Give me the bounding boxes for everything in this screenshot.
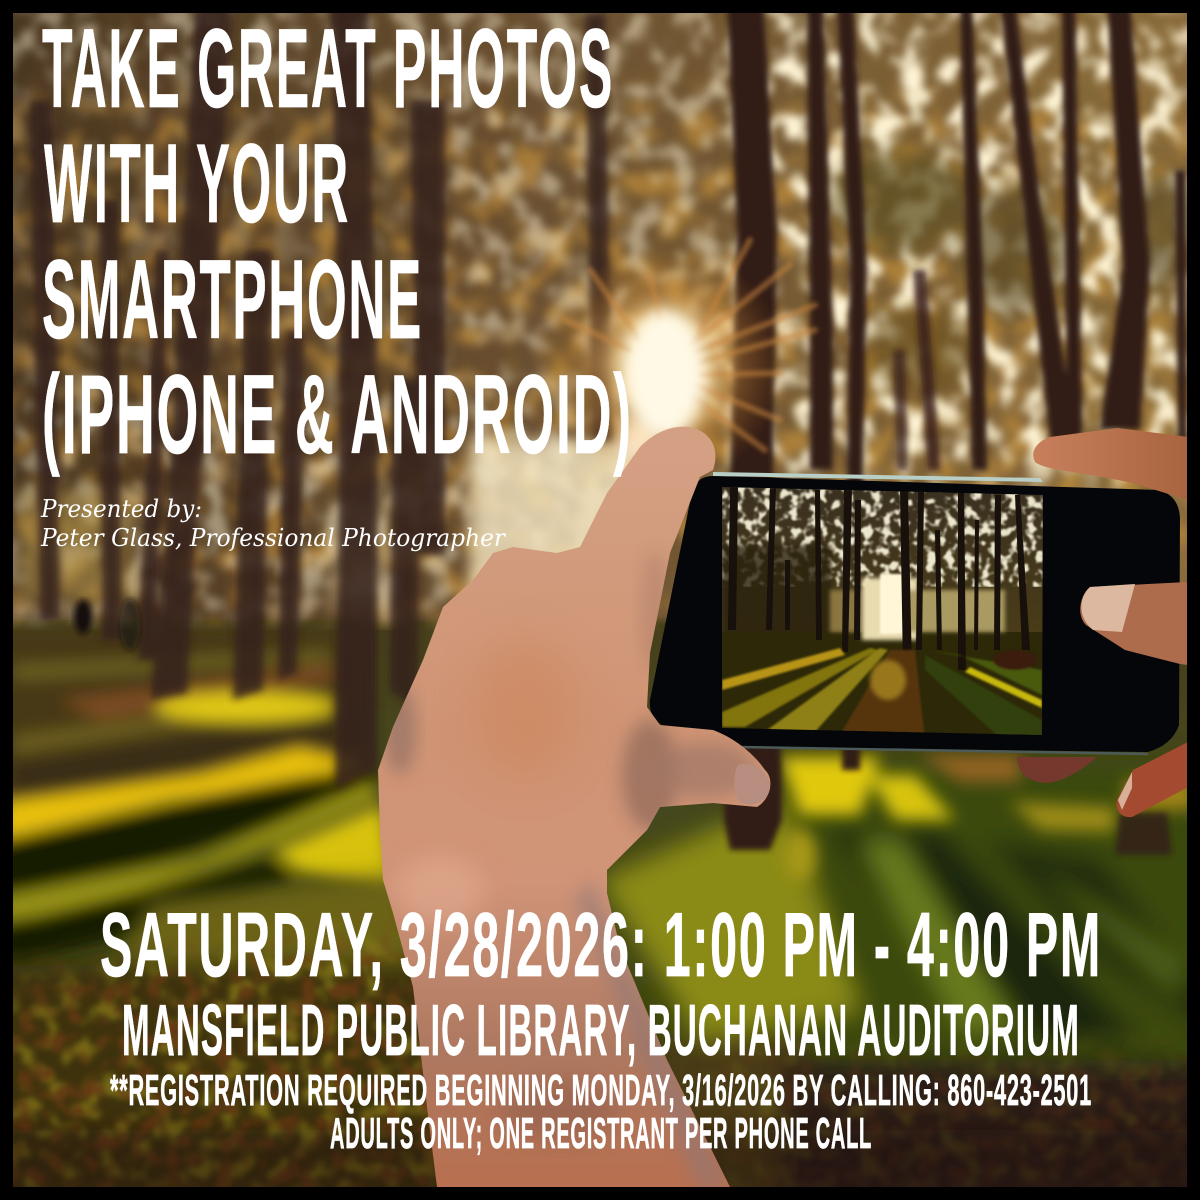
right hand fingers — [1033, 428, 1188, 817]
title: SMARTPHONE — [42, 237, 423, 362]
sun glow and rays — [545, 240, 815, 485]
title — [42, 6, 633, 477]
foliage highlights — [0, 0, 1200, 630]
presenter credit — [40, 495, 506, 552]
registration details — [110, 1066, 1092, 1158]
smartphone — [650, 472, 1180, 754]
left hand holding phone — [378, 427, 770, 1190]
ground light and shadow bands — [0, 630, 1200, 1200]
title: WITH YOUR — [44, 121, 350, 246]
presenter credit: Peter Glass, Professional Photographer — [40, 524, 506, 552]
tree trunks — [724, 0, 1187, 855]
phone screen forest image — [722, 487, 1043, 742]
right-hand back finger — [1017, 757, 1097, 783]
presenter credit: Presented by: — [40, 495, 202, 523]
distant figures — [74, 599, 140, 651]
